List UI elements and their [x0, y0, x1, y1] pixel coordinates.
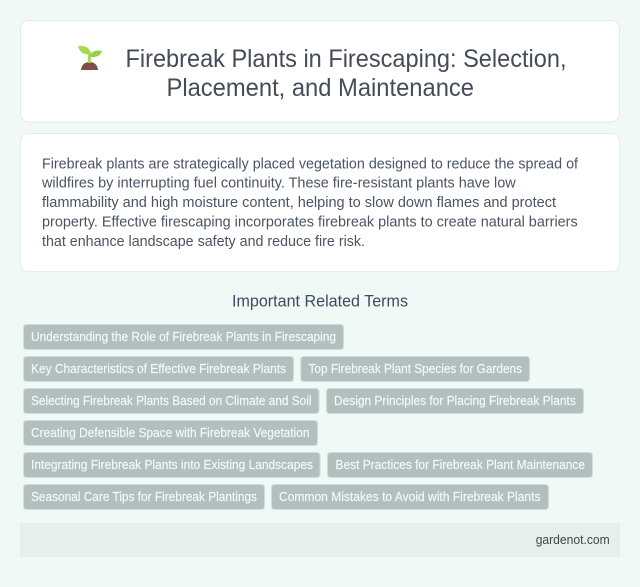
- title: Firebreak Plants in Firescaping: Selection,: [126, 45, 566, 73]
- tag: key characteristics: [24, 356, 294, 382]
- footer source text: gardenot.com: [536, 532, 610, 547]
- tag: top species: [301, 356, 530, 382]
- tag: selecting by climate and soil: [24, 388, 319, 414]
- tag: common mistakes: Common Mistakes to Avoid with Firebreak Plants: [279, 489, 541, 504]
- tag: seasonal care: Seasonal Care Tips for Firebreak Plantings: [31, 489, 257, 504]
- tag: best practices: Best Practices for Firebreak Plant Maintenance: [336, 457, 585, 472]
- title: Placement, and Maintenance: [166, 74, 474, 102]
- tag: defensible space: [24, 420, 318, 446]
- tag: seasonal care: [24, 484, 264, 510]
- panel: title header: [20, 20, 620, 122]
- footer: [20, 523, 620, 557]
- paragraph text: Firebreak plants are strategically placed vegetation designed to reduce the spread of: [42, 155, 579, 172]
- tag: integrating: [24, 452, 320, 478]
- paragraph text: flammability and high moisture content, helping to slow down flames and protect: [42, 194, 557, 211]
- title: [126, 45, 566, 102]
- icon: seedling: [78, 46, 102, 70]
- tag: understanding the role: [24, 324, 344, 350]
- paragraph text: [41, 155, 579, 250]
- paragraph text: property. Effective firescaping incorporates firebreak plants to create natural barriers: [42, 213, 578, 230]
- tag: understanding the role: Understanding the Role of Firebreak Plants in Firescaping: [31, 329, 336, 344]
- tag: best practices: [328, 452, 592, 478]
- tag: defensible space: Creating Defensible Space with Firebreak Vegetation: [31, 425, 310, 440]
- panel: description: [20, 134, 620, 272]
- heading: important related terms: Important Related Terms: [232, 292, 408, 310]
- tag: key characteristics: Key Characteristics of Effective Firebreak Plants: [31, 361, 286, 376]
- tag: selecting by climate and soil: Selecting Firebreak Plants Based on Climate and Soil: [31, 393, 312, 408]
- paragraph text: that enhance landscape safety and reduce fire risk.: [42, 233, 365, 250]
- paragraph text: wildfires by interrupting fuel continuity. These fire-resistant plants have low: [41, 175, 516, 192]
- tag: integrating: Integrating Firebreak Plants into Existing Landscapes: [31, 457, 313, 472]
- tag: common mistakes: [272, 484, 548, 510]
- tag: design principles: [326, 388, 584, 414]
- tag: top species: Top Firebreak Plant Species for Gardens: [308, 361, 522, 376]
- tag list: [24, 324, 592, 510]
- tag: design principles: Design Principles for Placing Firebreak Plants: [334, 393, 576, 408]
